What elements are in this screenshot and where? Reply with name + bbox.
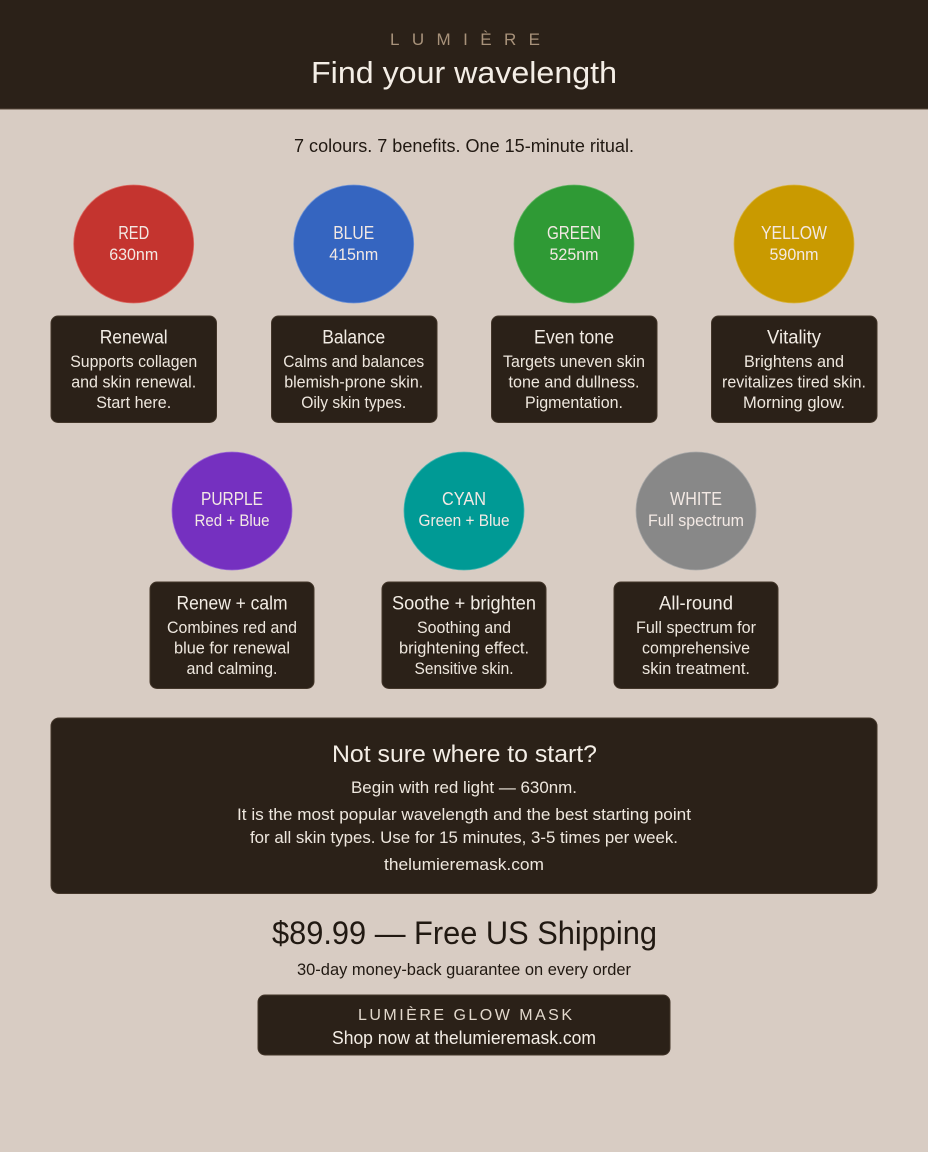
icon: blue circle [294,185,414,303]
card: renewal: and skin renewal. [71,374,196,392]
call to action: LUMIÈRE GLOW MASK [358,1005,572,1024]
icon: purple circle: Red + Blue [194,512,270,530]
card: renew + calm: and calming. [186,660,278,678]
card: all-round: Full spectrum for [636,619,756,637]
panel heading: Not sure where to start? [332,741,597,768]
card: renewal: Start here. [96,394,171,412]
panel: cyan [382,452,546,688]
icon: purple circle: PURPLE [201,489,263,509]
website: thelumieremask.com [384,856,544,874]
header band [0,0,928,110]
card: soothe + brighten: Soothe + brighten [392,594,536,614]
panel: red [51,185,216,422]
icon: red circle: 630nm [109,246,158,264]
card: renewal [51,316,216,422]
icon: cyan circle: Green + Blue [418,512,510,530]
card: vitality: revitalizes tired skin. [722,374,866,392]
card: vitality: Vitality [767,328,821,348]
panel: blue [272,185,437,422]
card: even tone: Targets uneven skin [503,353,645,371]
card: all-round: skin treatment. [642,660,750,678]
icon: cyan circle: CYAN [442,489,486,509]
price: $89.99 — Free US Shipping [272,915,657,951]
icon: red circle [74,185,194,303]
card: vitality [712,316,877,422]
card: renew + calm: blue for renewal [174,640,290,658]
panel: yellow [712,185,877,422]
card: even tone: Pigmentation. [525,394,623,412]
card: soothe + brighten: Soothing and [417,619,511,637]
icon: yellow circle: YELLOW [761,223,827,243]
card: soothe + brighten [382,582,546,688]
card: all-round: All-round [659,594,733,614]
subtitle: 7 colours. 7 benefits. One 15-minute ritual. [294,136,634,156]
card: all-round: comprehensive [642,640,750,658]
icon: green circle: GREEN [547,223,601,243]
icon: green circle [514,185,634,303]
card: balance: Calms and balances [283,353,424,371]
card: balance: Balance [322,328,385,348]
icon: yellow circle [734,185,854,303]
card: even tone: Even tone [534,328,614,348]
icon: blue circle: BLUE [333,223,374,243]
icon: blue circle: 415nm [329,246,378,264]
card: renew + calm [150,582,314,688]
icon: red circle: RED [118,223,149,243]
icon: white circle: WHITE [670,489,722,509]
icon: green circle: 525nm [550,246,598,264]
icon: purple circle [172,452,292,570]
card: renew + calm: Renew + calm [176,594,288,614]
card: balance [272,316,437,422]
call to action: Shop now at thelumieremask.com [332,1028,596,1048]
card: balance: Oily skin types. [301,394,406,412]
card: all-round [614,582,778,688]
card: vitality: Brightens and [744,353,844,371]
brand name: LUMIÈRE [390,30,540,49]
recommendation: Begin with red light — 630nm. [351,779,577,797]
card: renewal: Supports collagen [70,353,197,371]
call to action [258,995,670,1055]
icon: white circle: Full spectrum [648,512,744,530]
card: soothe + brighten: brightening effect. [399,640,529,658]
card: renew + calm: Combines red and [167,619,297,637]
card: even tone [492,316,657,422]
icon: cyan circle [404,452,524,570]
explanation [237,806,691,847]
panel: purple [150,452,314,688]
explanation: It is the most popular wavelength and the best starting point [237,806,691,824]
icon: yellow circle: 590nm [770,246,818,264]
icon: white circle [636,452,756,570]
guarantee: 30-day money-back guarantee on every order [297,961,632,979]
card: soothe + brighten: Sensitive skin. [414,660,514,678]
card: balance: blemish-prone skin. [284,374,423,392]
panel: white [614,452,778,688]
title: Find your wavelength [311,55,617,90]
card: vitality: Morning glow. [743,394,845,412]
panel: where to start [51,718,877,894]
explanation: for all skin types. Use for 15 minutes, 3-5 times per week. [250,829,678,847]
panel: green [492,185,657,422]
card: renewal: Renewal [100,328,168,348]
card: even tone: tone and dullness. [508,374,640,392]
